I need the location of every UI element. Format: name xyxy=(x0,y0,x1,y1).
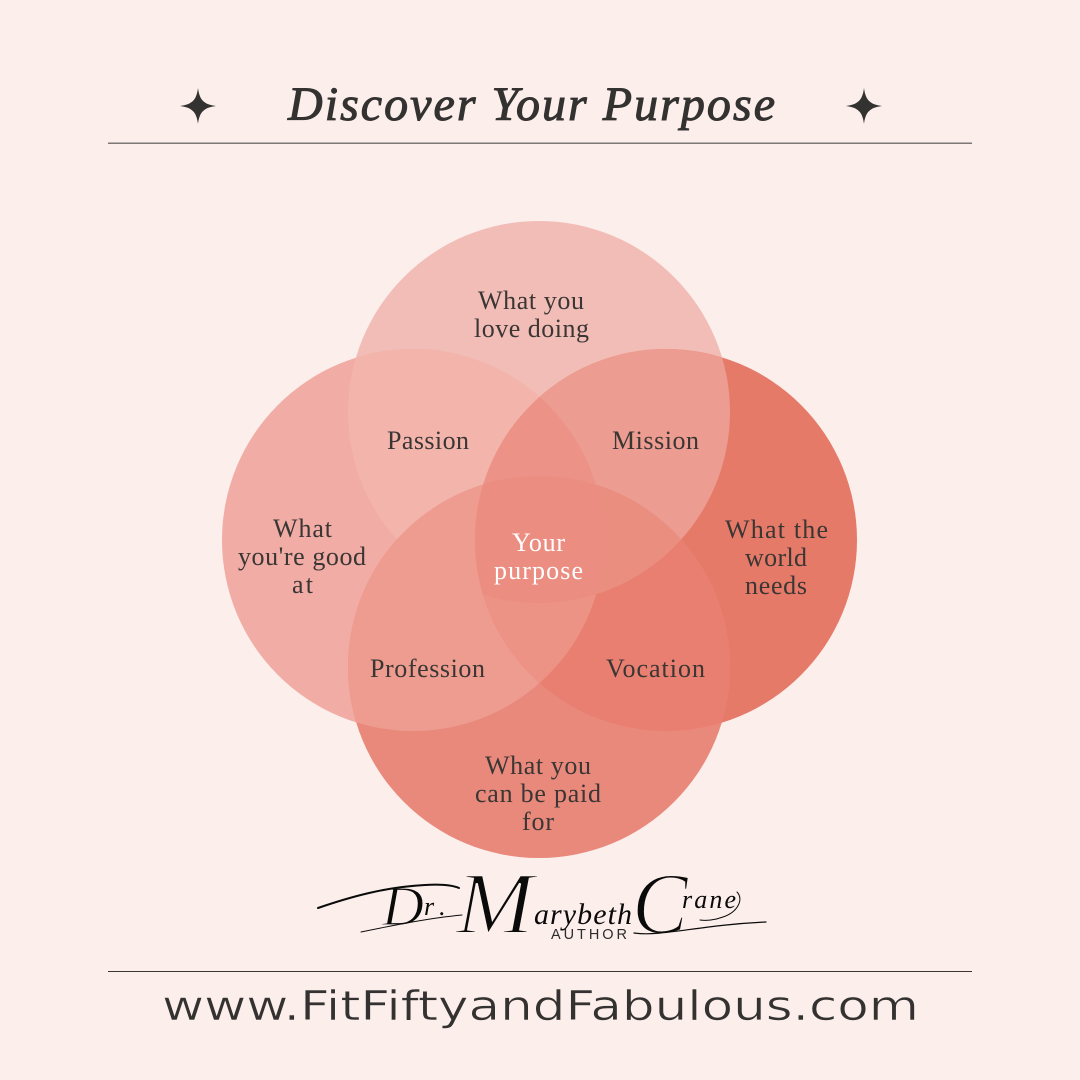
label: what you can be paid for: What you xyxy=(485,751,591,780)
circle: what the world needs xyxy=(475,349,857,731)
signature xyxy=(318,856,766,953)
overlap: passion xyxy=(397,398,538,539)
circle: what you can be paid for xyxy=(348,476,730,858)
signature author tag: AUTHOR xyxy=(551,927,627,943)
venn diagram xyxy=(222,221,857,858)
label: what you can be paid for: for xyxy=(522,807,554,836)
label: passion: Passion xyxy=(387,426,469,455)
signature under-sweep xyxy=(361,915,462,932)
label: what the world needs: world xyxy=(745,543,807,572)
label: mission: Mission xyxy=(612,426,699,455)
label: your purpose: purpose xyxy=(494,556,583,585)
signature name: r. xyxy=(424,892,460,921)
title: Discover Your Purpose xyxy=(287,78,775,131)
overlap: mission xyxy=(540,349,730,540)
overlap: profession xyxy=(348,484,539,731)
overlap: your purpose centre xyxy=(348,476,730,858)
circle: what you love doing xyxy=(348,221,730,603)
signature name: M xyxy=(454,856,539,953)
overlap: left, right and bottom xyxy=(483,594,596,683)
label: vocation: Vocation xyxy=(606,654,705,683)
signature name: rane xyxy=(682,885,736,914)
signature name: arybeth xyxy=(534,898,632,931)
label: profession: Profession xyxy=(370,654,485,683)
label: what you love doing: What you xyxy=(478,286,584,315)
circle: what you're good at xyxy=(222,349,604,731)
overlap: vocation xyxy=(540,540,730,731)
website url: www.FitFiftyandFabulous.com xyxy=(162,982,919,1030)
overlap: top, right and bottom xyxy=(596,485,681,594)
icon: left sparkle xyxy=(180,88,216,124)
signature closing flourish xyxy=(634,922,766,934)
icon: right sparkle xyxy=(846,88,882,124)
overlap: top, left and right xyxy=(484,397,596,484)
label: what the world needs: What the xyxy=(725,515,828,544)
label: what the world needs: needs xyxy=(745,571,807,600)
signature opening flourish xyxy=(318,885,459,908)
label: what you're good at: at xyxy=(292,570,314,599)
label: what you can be paid for: can be paid xyxy=(475,779,601,808)
signature name: C xyxy=(632,856,689,953)
label: what you're good at: you're good xyxy=(238,542,366,571)
label: your purpose: Your xyxy=(512,528,565,557)
signature end curl xyxy=(700,892,740,920)
label: what you're good at: What xyxy=(273,514,333,543)
signature name: D xyxy=(381,876,424,938)
label: what you love doing: love doing xyxy=(474,314,589,343)
